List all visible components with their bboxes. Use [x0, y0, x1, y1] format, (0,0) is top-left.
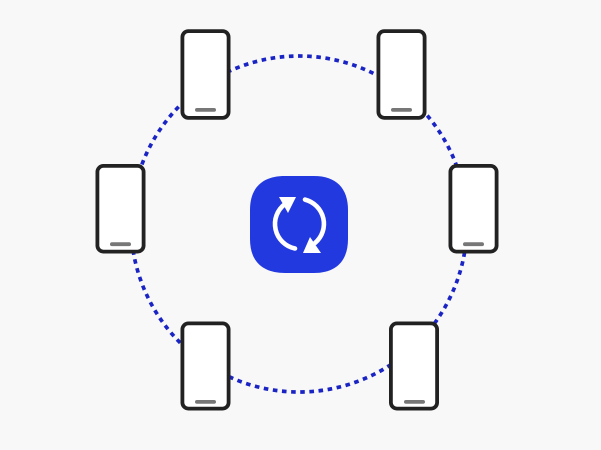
phone: middle left — [97, 166, 144, 252]
phone: bottom right — [391, 323, 437, 409]
phone: middle right — [450, 166, 497, 252]
icon: sync app — [250, 176, 348, 273]
dotted connection ring — [131, 56, 467, 392]
phone: bottom left — [182, 323, 229, 409]
phone: top right — [378, 31, 425, 118]
phone: top left — [182, 31, 229, 118]
